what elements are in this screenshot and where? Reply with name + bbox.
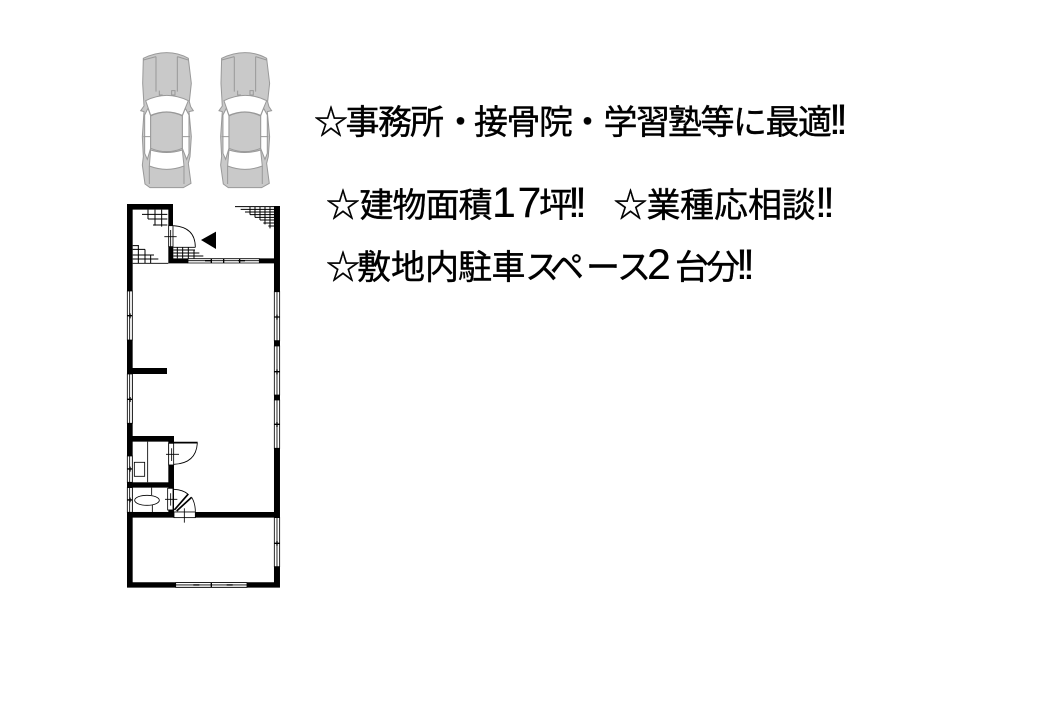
thin interior wall line bbox=[133, 263, 168, 482]
icon: car in right parking space bbox=[219, 53, 272, 188]
exterior and interior walls bbox=[127, 204, 280, 588]
text: business types negotiable: ☆業種応相談 bbox=[614, 187, 816, 225]
sink bbox=[134, 462, 145, 476]
floor plan bbox=[127, 204, 280, 588]
headline: suitable uses: ☆事務所・接骨院・学習塾等に最適 bbox=[314, 104, 832, 142]
headline: suitable uses: !! bbox=[829, 96, 848, 144]
text: parking for two cars: 台分 bbox=[675, 249, 740, 287]
text: building area: 17 bbox=[492, 179, 541, 227]
text: parking for two cars: 2 bbox=[647, 241, 671, 289]
text: business types negotiable: !! bbox=[815, 179, 835, 227]
toilet door and threshold bbox=[165, 488, 195, 523]
porch hatching bbox=[235, 207, 274, 228]
closet and entry tile hatching bbox=[133, 210, 203, 263]
text: building area: !! bbox=[568, 179, 587, 227]
text: parking for two cars: ☆敷地内駐車スペース bbox=[326, 249, 651, 287]
text: parking for two cars: !! bbox=[736, 241, 755, 289]
text: building area: ☆建物面積 bbox=[326, 187, 492, 225]
toilet bbox=[135, 488, 159, 512]
entrance door bbox=[164, 226, 195, 247]
interior room fills bbox=[127, 442, 168, 512]
entrance arrow bbox=[201, 232, 216, 249]
icon: car in left parking space bbox=[141, 53, 193, 188]
windows bbox=[127, 259, 280, 587]
text: building area: 坪 bbox=[539, 187, 573, 225]
washroom door bbox=[166, 443, 198, 465]
